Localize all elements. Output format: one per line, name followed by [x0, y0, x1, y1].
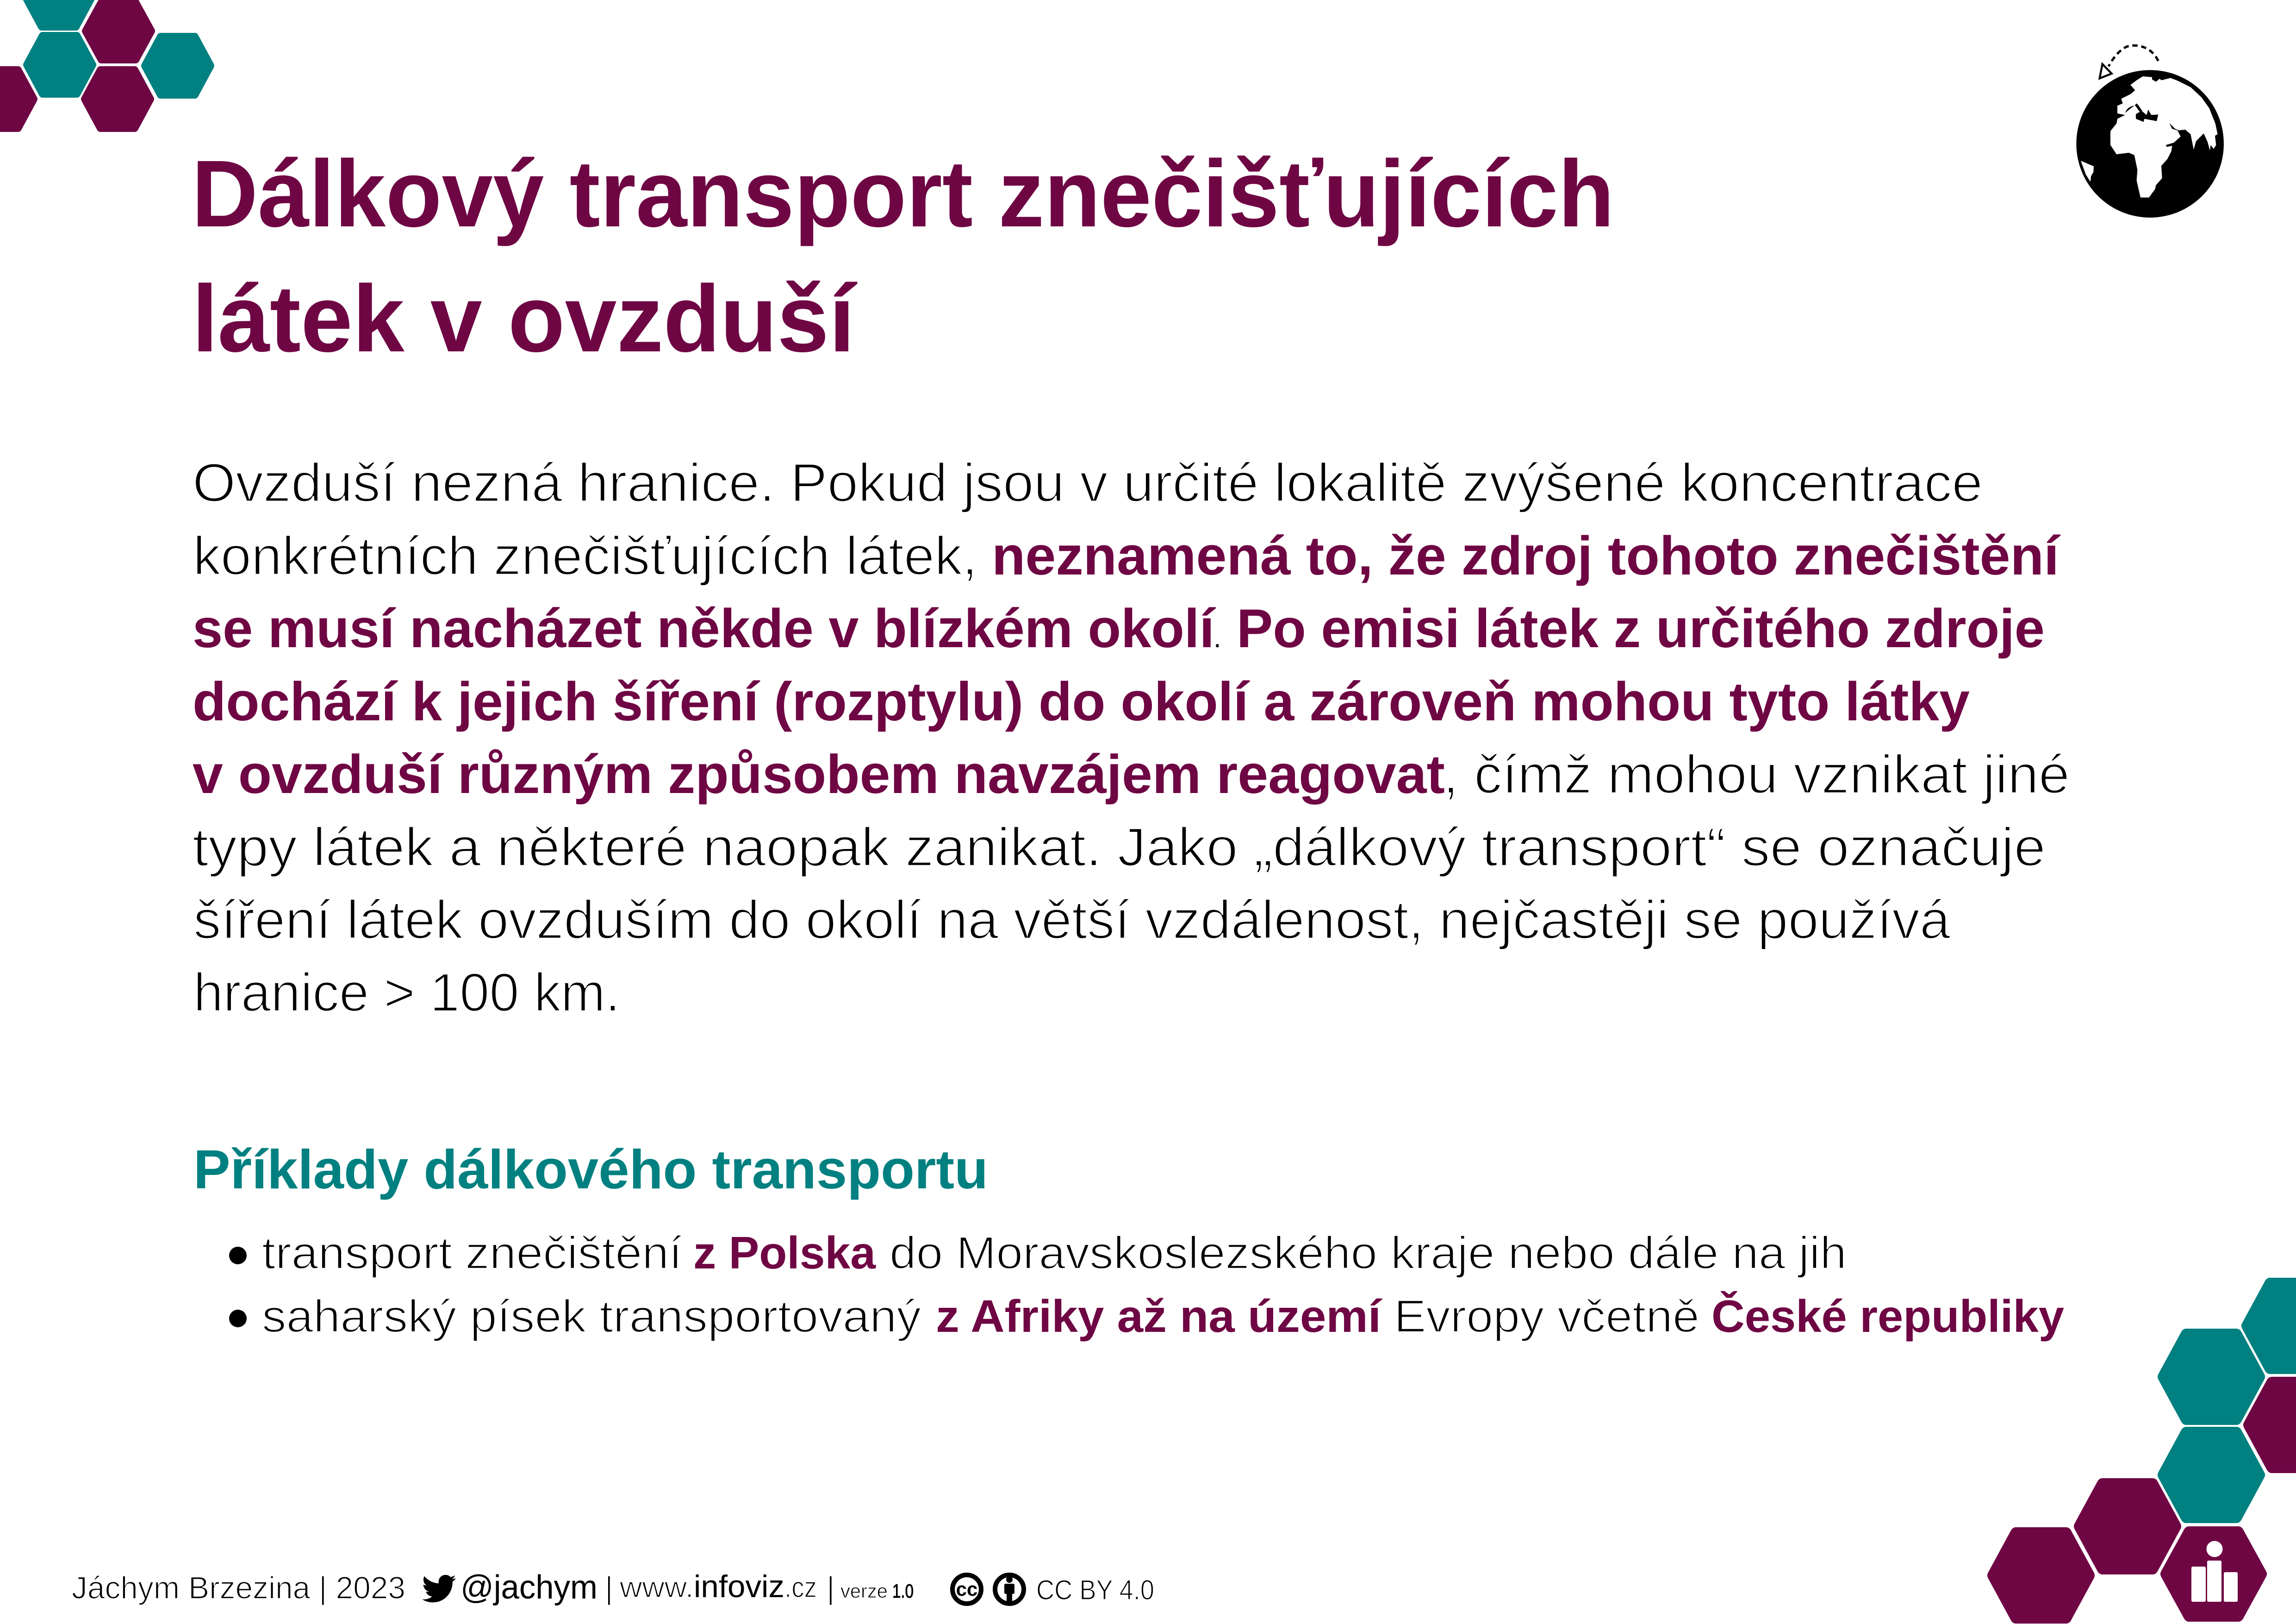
text block: intro paragraph: typy látek a některé naopak zanikat. Jako „dálkový transport“ se označuje — [193, 817, 2046, 877]
list item: Africa — [229, 1291, 2064, 1342]
icon: twitter bird — [422, 1575, 456, 1602]
website — [605, 1569, 835, 1605]
list item: Poland: transport znečištění — [262, 1227, 682, 1278]
title: Dálkový transport znečišťujících — [192, 141, 1614, 247]
text block: intro paragraph: . — [1213, 622, 1221, 653]
list item: Africa: saharský písek transportovaný — [262, 1291, 921, 1342]
text block: intro paragraph: šíření látek ovzduším do okolí na větší vzdálenost, nejčastěji se používá — [193, 889, 1951, 950]
text block: intro paragraph: Ovzduší nezná hranice. Pokud jsou v určité lokalitě zvýšené koncentrace — [193, 452, 1983, 513]
icon: creative commons — [952, 1575, 981, 1604]
website: .cz — [784, 1572, 817, 1604]
version — [840, 1580, 914, 1602]
version: verze — [840, 1580, 888, 1602]
website: www. — [619, 1572, 694, 1604]
title: látek v ovzduší — [192, 266, 858, 372]
text block: intro paragraph: konkrétních znečišťujících látek, — [193, 525, 977, 586]
text block: intro paragraph: dochází k jejich šíření (rozptylu) do okolí a zároveň mohou tyto látky — [193, 671, 1970, 732]
icon: creative commons: cc — [956, 1578, 977, 1600]
list item: Africa: České republiky — [1711, 1291, 2064, 1342]
decoration: bottom-right hexagon cluster — [1993, 1283, 2296, 1618]
list item: Africa: z Afriky až na území — [936, 1291, 1382, 1342]
twitter handle: @jachym — [460, 1569, 597, 1606]
decoration: top-left hexagon cluster — [0, 0, 211, 128]
text block: intro paragraph: neznamená to, že zdroj tohoto znečištění — [992, 525, 2060, 587]
text block: intro paragraph: , čímž mohou vznikat jiné — [1443, 744, 2070, 805]
icon: bar chart in hexagon — [2166, 1532, 2261, 1616]
list item: Poland: do Moravskoslezského kraje nebo dále na jih — [890, 1227, 1847, 1278]
heading: examples: Příklady dálkového transportu — [193, 1139, 988, 1200]
footer: credits — [72, 1569, 1154, 1606]
text block: intro paragraph: Po emisi látek z určitého zdroje — [1237, 598, 2045, 659]
website: infoviz — [694, 1569, 784, 1604]
website: | — [827, 1570, 835, 1605]
text block: intro paragraph: hranice > 100 km. — [193, 962, 620, 1023]
title — [192, 141, 1614, 372]
website: | — [605, 1570, 613, 1605]
list item: Poland: z Polska — [693, 1227, 876, 1278]
icon: attribution — [995, 1575, 1024, 1604]
licence: CC BY 4.0 — [1036, 1574, 1154, 1605]
version: 1.0 — [892, 1580, 914, 1602]
author and year: Jáchym Brzezina | 2023 — [72, 1570, 405, 1605]
list item: Africa: Evropy včetně — [1394, 1291, 1699, 1342]
text block: intro paragraph — [193, 452, 2070, 1023]
list: examples of long-range transport — [229, 1227, 2064, 1342]
icon: globe with dashed arrow — [2076, 45, 2224, 218]
list item: Poland — [229, 1227, 1847, 1278]
text block: intro paragraph: v ovzduší různým způsobem navzájem reagovat — [193, 744, 1445, 805]
text block: intro paragraph: se musí nacházet někde v blízkém okolí — [193, 598, 1216, 659]
